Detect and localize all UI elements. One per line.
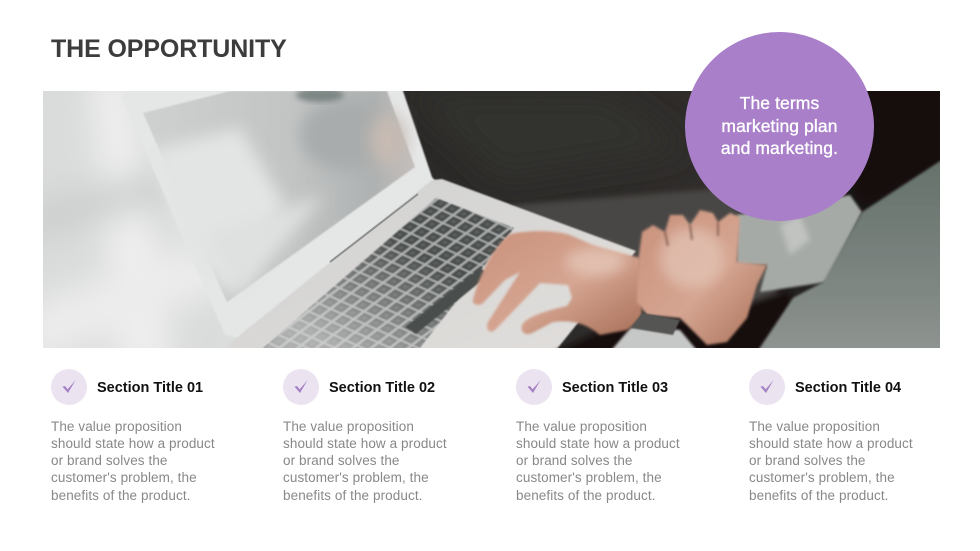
section 01: customer's problem, the bbox=[51, 470, 197, 485]
section 03 bbox=[516, 369, 680, 503]
icon: check badge 04 bbox=[749, 369, 785, 405]
section 04 bbox=[749, 369, 913, 503]
wristwatch bbox=[630, 313, 680, 335]
section 02: benefits of the product. bbox=[283, 488, 422, 503]
section 01: should state how a product bbox=[51, 436, 215, 451]
laptop screen bbox=[122, 88, 436, 338]
section 03: Section Title 03 bbox=[562, 380, 668, 396]
section 04: benefits of the product. bbox=[749, 488, 888, 503]
callout circle: The terms bbox=[740, 93, 819, 113]
title: THE OPPORTUNITY bbox=[51, 35, 287, 63]
right hand bbox=[637, 210, 767, 345]
section 04: should state how a product bbox=[749, 436, 913, 451]
dark couch bbox=[395, 80, 955, 360]
section 04: customer's problem, the bbox=[749, 470, 895, 485]
section 03: benefits of the product. bbox=[516, 488, 656, 503]
section 01: Section Title 01 bbox=[97, 380, 203, 396]
section 01: benefits of the product. bbox=[51, 488, 190, 503]
section 03: or brand solves the bbox=[516, 453, 633, 468]
left hand bbox=[473, 231, 642, 335]
section 04: or brand solves the bbox=[749, 453, 866, 468]
section 02: The value proposition bbox=[283, 418, 414, 434]
section 04: Section Title 04 bbox=[795, 380, 901, 396]
icon: check badge 03 bbox=[516, 369, 552, 405]
section 02: customer's problem, the bbox=[283, 470, 429, 485]
section 04: The value proposition bbox=[749, 418, 880, 434]
section 02 bbox=[283, 369, 447, 503]
icon: check badge 01 bbox=[51, 369, 87, 405]
section 01: The value proposition bbox=[51, 418, 182, 434]
section 01: or brand solves the bbox=[51, 453, 168, 468]
section 02: Section Title 02 bbox=[329, 380, 435, 396]
icon: check badge 02 bbox=[283, 369, 319, 405]
callout circle bbox=[685, 32, 874, 221]
photo: hands typing on a laptop bbox=[43, 91, 940, 348]
section 01 bbox=[51, 369, 215, 503]
callout circle: marketing plan bbox=[721, 116, 838, 136]
section 03: The value proposition bbox=[516, 418, 647, 434]
photo background bbox=[43, 91, 940, 348]
section 02: should state how a product bbox=[283, 436, 447, 451]
section 02: or brand solves the bbox=[283, 453, 400, 468]
laptop base and keyboard bbox=[215, 179, 636, 360]
section 03: customer's problem, the bbox=[516, 470, 662, 485]
callout circle: and marketing. bbox=[721, 138, 838, 158]
sweater and sleeve bbox=[540, 80, 960, 370]
section 03: should state how a product bbox=[516, 436, 680, 451]
